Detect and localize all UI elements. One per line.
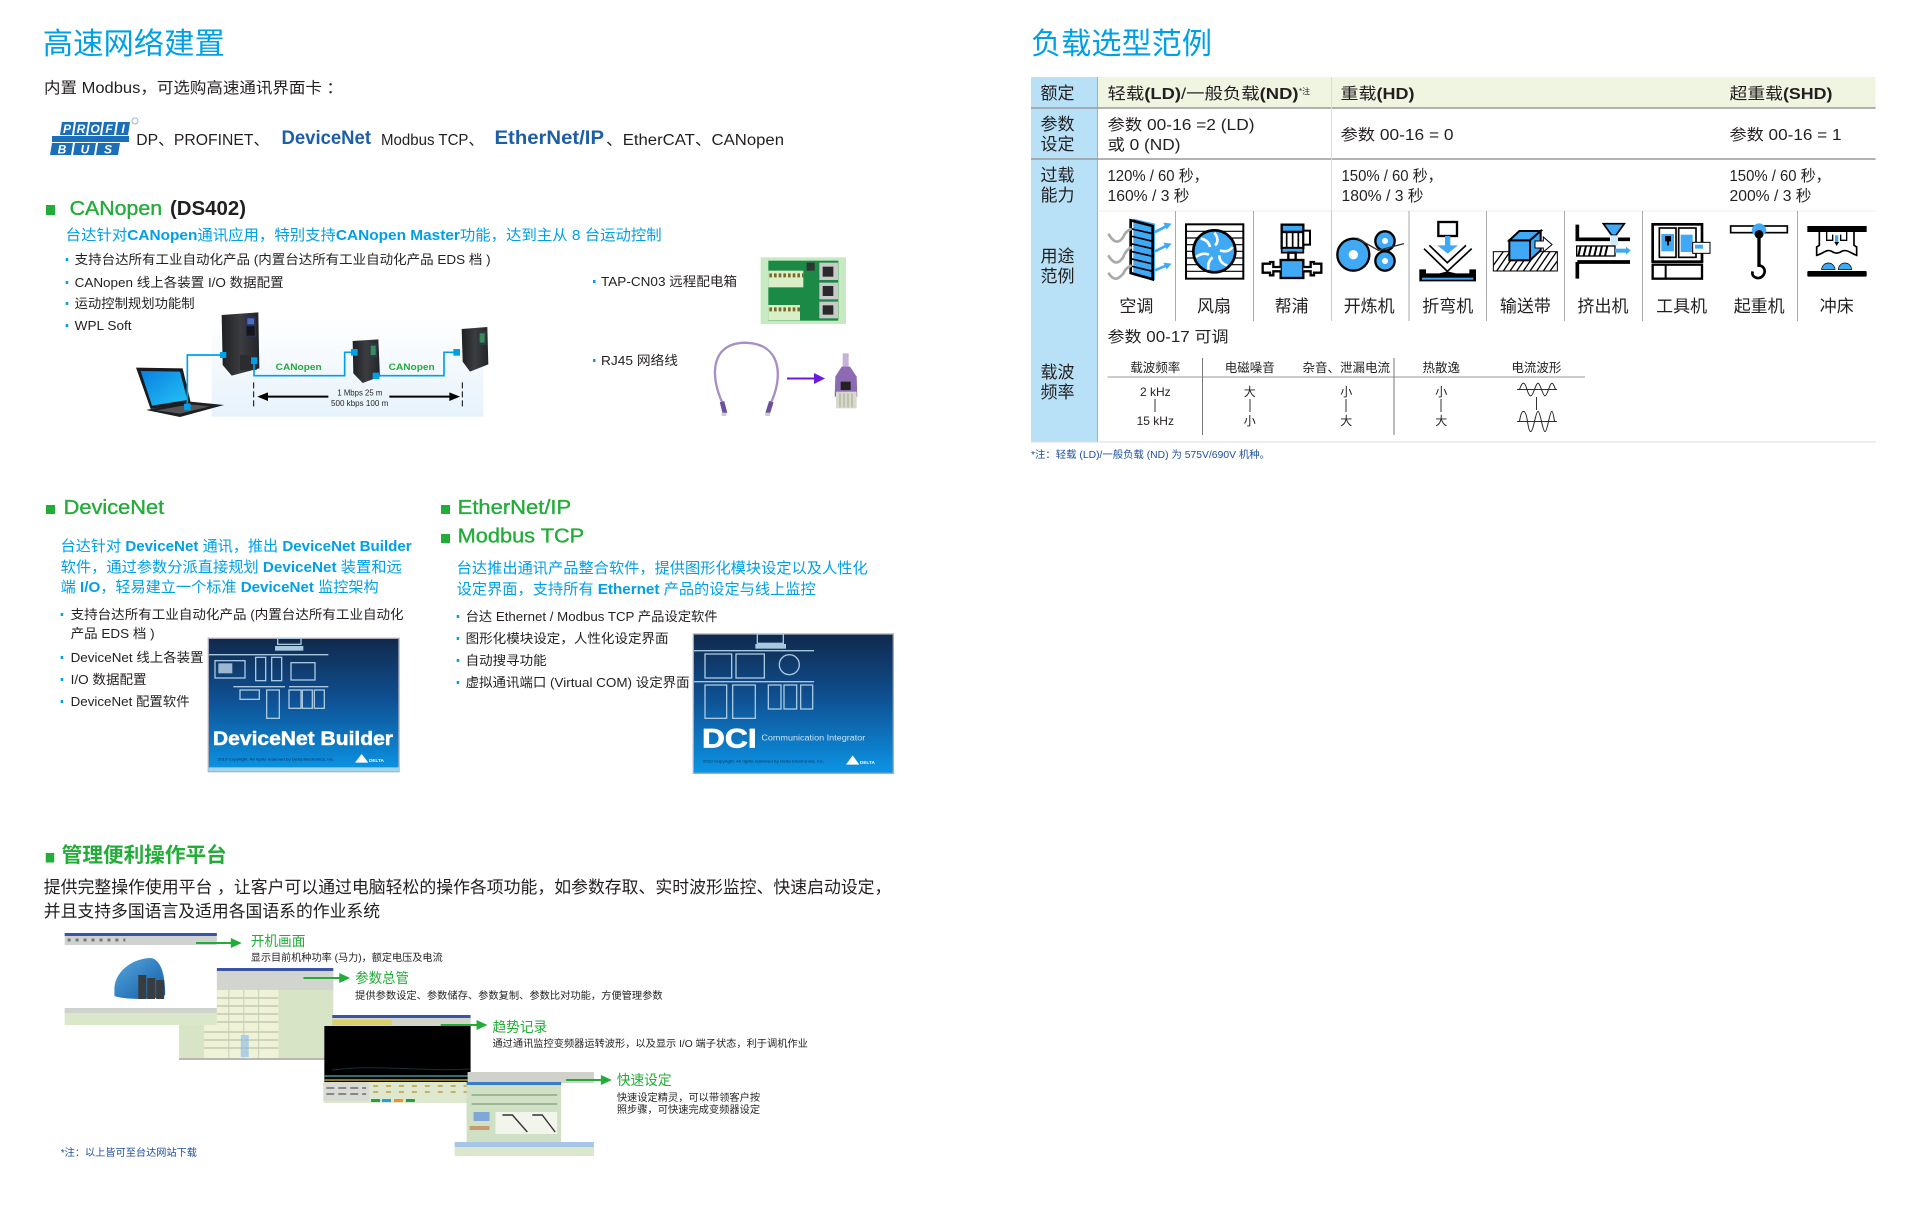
RJ45 label: RJ45 网络线 [601, 353, 678, 368]
screenshot: trend record [323, 1015, 471, 1103]
description: 提供完整操作使用平台 ，让客户可以通过电脑轻松的操作各项功能，如参数存取、实时波形监控、快速启动设定， [44, 877, 891, 897]
blue summary text: 设定界面，支持所有 Ethernet 产品的设定与线上监控 [457, 581, 816, 598]
carrier frequency table: 小 [1244, 414, 1256, 428]
blue summary text [457, 560, 868, 598]
application labels: 折弯机 [1422, 297, 1473, 316]
callout: trend record: 趋势记录 [492, 1019, 547, 1035]
icon: machine tool [1653, 224, 1710, 279]
Delta mark [355, 754, 384, 763]
parameter setting row: 参数 00-16 = 1 [1730, 126, 1842, 144]
Delta mark: DELTA [369, 758, 384, 763]
icon: pump [1263, 225, 1321, 278]
carrier frequency table: 2 kHz [1140, 385, 1171, 399]
carrier frequency table: 大 [1244, 385, 1256, 399]
overload row: 200% / 3 秒 [1730, 187, 1812, 205]
application labels: 帮浦 [1275, 297, 1309, 316]
callout: quick setup [617, 1072, 760, 1116]
row labels [1040, 84, 1074, 402]
arrow: start page [196, 938, 242, 948]
protocol list: Modbus TCP、 [381, 132, 484, 149]
label: CANopen right: CANopen [389, 362, 435, 372]
carrier frequency table: 小 [1340, 385, 1352, 399]
application labels: 起重机 [1734, 297, 1785, 316]
protocol list [136, 128, 784, 149]
distance labels [331, 389, 389, 408]
icon: fan [1186, 224, 1243, 279]
row labels: 载波 [1040, 363, 1074, 382]
heading: CANopen: (DS402) [170, 198, 246, 220]
icon: rolling mill [1337, 231, 1404, 271]
row labels: 过载 [1040, 166, 1074, 185]
section: high-speed network [43, 28, 784, 156]
protocol list: EtherNet/IP [494, 128, 604, 149]
title: high-speed network: 高速网络建置 [43, 28, 225, 61]
callout: start page: 显示目前机种功率 (马力)，额定电压及电流 [251, 951, 443, 964]
parameter setting row: 参数 00-16 =2 (LD) [1108, 116, 1254, 134]
screenshot: quick setup [455, 1072, 594, 1156]
logo: PROFIBUS: S [104, 142, 112, 156]
section: management platform [44, 843, 891, 1159]
arrow: parameter manager [303, 973, 350, 983]
table backgrounds [1031, 77, 1876, 442]
drive: small right [462, 327, 488, 372]
row labels: 额定 [1040, 84, 1074, 103]
row labels: 用途 [1040, 247, 1074, 266]
heading: CANopen: CANopen [70, 198, 162, 220]
image: TAP-CN03 board [761, 257, 846, 324]
description [44, 877, 891, 921]
CANopen wiring [187, 352, 457, 407]
distance labels: 1 Mbps 25 m [337, 389, 383, 398]
blue summary text: 台达推出通讯产品整合软件，提供图形化模块设定以及人性化 [457, 560, 868, 577]
drive: medium [353, 339, 380, 383]
feature list: 自动搜寻功能 [466, 653, 547, 668]
row labels: 能力 [1040, 186, 1074, 205]
image: RJ45 cable [715, 343, 778, 416]
icon: punch press [1807, 226, 1867, 277]
row labels: 设定 [1040, 135, 1074, 154]
overload row: 120% / 60 秒， [1108, 167, 1208, 185]
carrier frequency table: 热散逸 [1423, 360, 1461, 375]
logo: PROFIBUS: O [90, 122, 100, 136]
splash title DCI: DCI [702, 723, 757, 753]
image: DCI splash [693, 634, 893, 773]
application labels: 风扇 [1197, 297, 1231, 316]
overload row: 150% / 60 秒， [1342, 167, 1442, 185]
drive: large [222, 312, 259, 376]
image: DeviceNet Builder splash [208, 638, 399, 772]
callout: start page [251, 933, 443, 964]
feature list: 产品 EDS 档 ) [71, 626, 155, 641]
application labels: 输送带 [1500, 297, 1551, 316]
application labels: 挤出机 [1578, 297, 1628, 316]
icon: extruder [1577, 224, 1631, 279]
rating row: 轻载 (LD) /一般负载 (ND) [1108, 85, 1298, 103]
logo: PROFIBUS: I [121, 122, 125, 136]
callout: start page: 开机画面 [251, 933, 305, 949]
section: DeviceNet [46, 497, 412, 772]
feature list: DeviceNet 线上各装置 [71, 650, 204, 665]
arrow: trend record [441, 1020, 488, 1030]
download footnote: *注：以上皆可至台达网站下载 [61, 1146, 197, 1159]
table footnote: *注：轻载 (LD)/一般负载 (ND) 为 575V/690V 机种。 [1031, 448, 1270, 461]
heading: Modbus TCP: Modbus TCP [458, 526, 584, 548]
parameter setting row [1108, 116, 1842, 154]
parameter setting row: 或 0 (ND) [1108, 136, 1180, 154]
blue summary text: 台达针对 DeviceNet 通讯，推出 DeviceNet Builder [61, 538, 412, 555]
distance labels: 500 kbps 100 m [331, 399, 389, 408]
callout: parameter manager [355, 970, 663, 1002]
screenshot: start page [65, 933, 217, 1025]
icon: conveyor [1493, 231, 1557, 271]
label: CANopen left: CANopen [276, 362, 322, 372]
icon: press brake [1419, 222, 1476, 281]
rating row: *注 [1299, 86, 1310, 96]
icon: air conditioner [1108, 219, 1172, 280]
carrier frequency table: 大 [1435, 414, 1447, 428]
application labels: 开炼机 [1344, 297, 1395, 316]
application labels: 冲床 [1820, 297, 1854, 316]
logo: PROFIBUS: P [63, 122, 72, 136]
splash copyright: 2010 Copyright. All rights reserved by Delta Electronics, Inc. [703, 760, 824, 764]
arrow: to connector [787, 373, 825, 384]
rating row: 超重载 (SHD) [1730, 85, 1832, 103]
overload row [1108, 167, 1830, 205]
application labels: 工具机 [1656, 297, 1707, 316]
rating row: 重载(HD) [1340, 85, 1414, 103]
application labels: 空调 [1119, 297, 1153, 316]
title: load selection: 负载选型范例 [1031, 28, 1212, 61]
callout: quick setup: 照步骤，可快速完成变频器设定 [617, 1103, 760, 1116]
heading: DeviceNet: DeviceNet [64, 497, 165, 519]
callout: parameter manager: 参数总管 [355, 970, 409, 986]
icon: crane [1731, 223, 1787, 278]
section: CANopen [46, 198, 857, 417]
feature list [66, 252, 491, 333]
protocol list: DeviceNet [282, 128, 372, 149]
heading: management platform: 管理便利操作平台 [62, 843, 227, 867]
carrier frequency table: 15 kHz [1137, 414, 1174, 428]
blue summary text: 软件，通过参数分派直接规划 DeviceNet 装置和远 [61, 559, 402, 576]
feature list: 支持台达所有工业自动化产品 (内置台达所有工业自动化 [71, 607, 404, 622]
carrier frequency table: 载波频率 [1130, 360, 1180, 375]
logo: PROFIBUS: R [77, 122, 86, 136]
Delta mark [846, 755, 875, 765]
callout: trend record: 通过通讯监控变频器运转波形，以及显示 I/O 端子状态，利于调机作业 [492, 1037, 808, 1050]
section: EtherNet/IP and Modbus TCP [441, 497, 893, 773]
callout: quick setup: 快速设定 [617, 1072, 672, 1088]
feature list: DeviceNet 配置软件 [71, 694, 190, 709]
overload row: 150% / 60 秒， [1730, 167, 1830, 185]
feature list: 图形化模块设定，人性化设定界面 [466, 631, 669, 646]
feature list: 虚拟通讯端口 (Virtual COM) 设定界面 [466, 675, 690, 690]
row labels: 参数 [1040, 115, 1074, 134]
feature list: 台达 Ethernet / Modbus TCP 产品设定软件 [466, 609, 718, 624]
protocol list: 、EtherCAT、CANopen [606, 132, 784, 149]
blue summary text: 台达针对CANopen通讯应用，特别支持CANopen Master功能，达到主从 8 台运动控制 [66, 226, 662, 244]
image: RJ45 connector [835, 353, 857, 408]
feature list: 运动控制规划功能制 [75, 296, 195, 311]
carrier frequency table: 小 [1435, 385, 1447, 399]
heading: CANopen [46, 198, 246, 220]
feature list: WPL Soft [75, 318, 132, 333]
network diagram [136, 312, 488, 417]
splash subtitle: Communication Integrator [761, 734, 866, 743]
feature list: 支持台达所有工业自动化产品 (内置台达所有工业自动化产品 EDS 档 ) [75, 252, 491, 267]
row labels: 频率 [1040, 383, 1074, 402]
row labels: 范例 [1040, 267, 1074, 286]
callout: parameter manager: 提供参数设定、参数储存、参数复制、参数比对功能，方便管理参数 [355, 989, 663, 1002]
arrow: quick setup [566, 1075, 612, 1085]
description: 并且支持多国语言及适用各国语系的作业系统 [44, 902, 380, 921]
protocol list: DP、PROFINET、 [136, 132, 269, 149]
application labels [1119, 297, 1854, 316]
rating row [1108, 85, 1832, 103]
Delta mark: DELTA [860, 760, 875, 765]
heading: EtherNet/IP: EtherNet/IP [458, 497, 571, 519]
carrier frequency table: 电磁噪音 [1225, 360, 1275, 375]
blue summary text: 端 I/O，轻易建立一个标准 DeviceNet 监控架构 [61, 579, 379, 596]
blue summary text [61, 538, 412, 596]
logo: PROFIBUS: U [81, 142, 90, 156]
parameter setting row: 参数 00-16 = 0 [1340, 126, 1454, 144]
distance arrow [254, 382, 462, 407]
feature list [457, 609, 718, 690]
splash title: DeviceNet Builder [213, 729, 394, 750]
feature list: CANopen 线上各装置 I/O 数据配置 [75, 275, 284, 290]
logo: PROFIBUS: F [105, 122, 113, 136]
TAP-CN03 label: TAP-CN03 远程配电箱 [601, 274, 737, 289]
feature list [61, 607, 404, 709]
screenshot: parameter manager [179, 968, 333, 1060]
logo: PROFIBUS [50, 118, 138, 156]
callout: quick setup: 快速设定精灵，可以带领客户按 [617, 1091, 760, 1104]
carrier frequency table: 大 [1340, 414, 1352, 428]
carrier frequency table [1108, 358, 1585, 435]
overload row: 180% / 3 秒 [1342, 187, 1424, 205]
logo: PROFIBUS: B [58, 142, 67, 156]
carrier frequency table: 杂音、泄漏电流 [1303, 360, 1391, 375]
laptop [136, 368, 224, 417]
section: load selection example [1031, 28, 1876, 461]
intro text: 内置 Modbus，可选购高速通讯界面卡 ： [44, 79, 343, 97]
overload row: 160% / 3 秒 [1108, 187, 1190, 205]
carrier frequency table: 电流波形 [1511, 361, 1562, 375]
feature list: I/O 数据配置 [71, 672, 147, 687]
carrier note: 参数 00-17 可调 [1108, 328, 1228, 346]
splash copyright: 2010 Copyright. All rights reserved by Delta Electronics, Inc. [218, 758, 334, 762]
callout: trend record [492, 1019, 808, 1050]
